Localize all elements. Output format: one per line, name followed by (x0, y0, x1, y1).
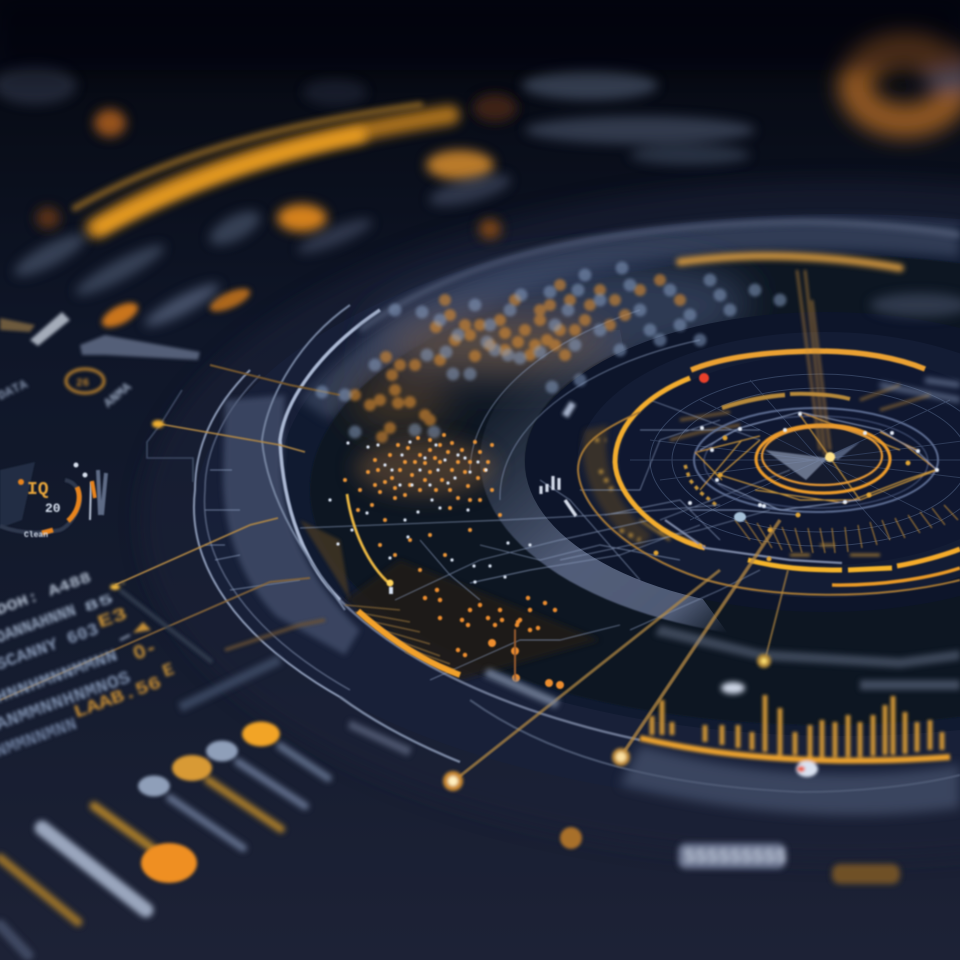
top blurred grey labels (0, 65, 960, 333)
upper left labels: 26 (76, 378, 89, 390)
inner dial disc (525, 312, 960, 612)
bottom bar chart (640, 695, 950, 777)
outer dial disc (195, 214, 960, 815)
hatching (345, 505, 958, 670)
inner segmented ring (722, 394, 850, 408)
gauge widget: Clean (24, 531, 48, 540)
dial grid and brown details (583, 374, 960, 555)
top large orange arc (75, 105, 450, 228)
left data table: E (160, 660, 177, 683)
radial orange spokes (0, 365, 788, 780)
lower particle cluster (425, 590, 560, 685)
vignette (0, 0, 960, 70)
sharp particle cluster: white (330, 442, 530, 582)
white chart marks (541, 403, 576, 516)
left data table: 85 (82, 591, 116, 617)
left data table: E3 (95, 605, 130, 634)
sharp particle haze (355, 440, 495, 496)
slider knobs (138, 722, 280, 883)
orange arc segment (358, 611, 460, 675)
yellow arc segment (347, 494, 394, 594)
left grey band (223, 395, 360, 655)
grey data band (480, 330, 724, 631)
faded left label (178, 655, 282, 712)
middle dark field (300, 255, 960, 725)
bokeh haze (350, 245, 755, 430)
step outline (120, 390, 212, 662)
glowing nodes (656, 373, 937, 559)
big orange ring (578, 351, 960, 595)
left data table: LAAB.56 (71, 673, 165, 724)
lower ring labels (348, 625, 960, 756)
left data table (0, 570, 177, 763)
top right orange ring blob (855, 49, 960, 121)
top blurred orange blobs (36, 94, 517, 239)
upper left labels: ANMA (101, 379, 135, 411)
bokeh orange particles (355, 280, 680, 437)
web of fine lines (205, 310, 790, 680)
upper left labels (0, 312, 200, 428)
mid-left orange dashes (98, 284, 253, 332)
bottom right labels (678, 843, 900, 884)
gauge widget: 20 (45, 501, 61, 516)
bokeh blue particles (322, 268, 780, 432)
gauge widget (0, 462, 106, 540)
central mesh triangle (765, 442, 860, 480)
left data table: O- (131, 637, 161, 667)
vertical light beam (797, 270, 830, 455)
bottom right labels: SSSSSSSSS (684, 846, 787, 868)
bottom nodes (443, 654, 771, 849)
outer white rings (194, 305, 960, 792)
central target ring (756, 425, 890, 493)
bottom left sliders (0, 746, 328, 955)
top outer arc (360, 222, 960, 330)
sharp particle cluster: orange (345, 435, 500, 570)
constellation ring (690, 408, 938, 515)
gauge widget: IQ (27, 480, 49, 500)
